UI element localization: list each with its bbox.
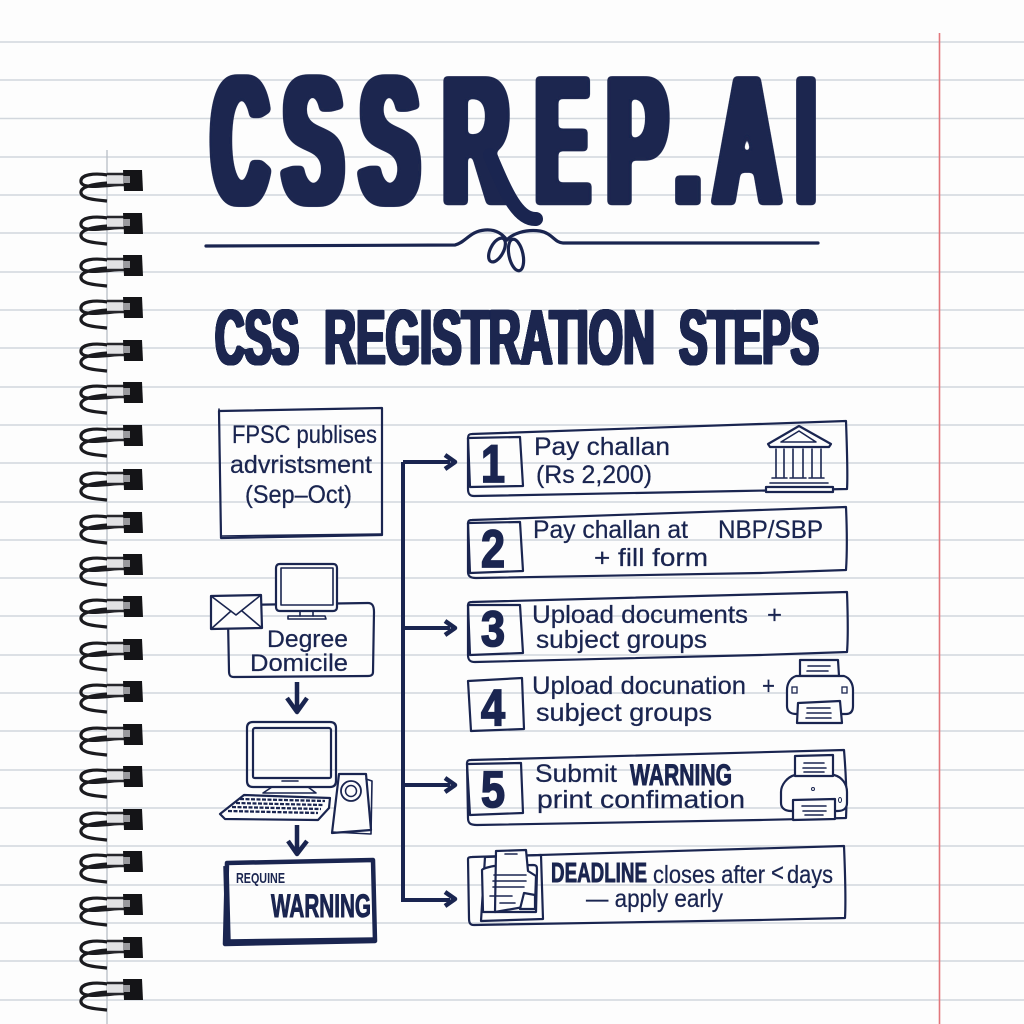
step 5: 5 [481,761,505,818]
arrow: documents to computer [287,682,307,712]
step 3: Upload documents [532,601,748,629]
icon: small monitor [276,564,337,619]
icon: printer with paper [781,755,847,820]
spiral binding [81,170,143,1010]
panel: warning box: WARNING [271,888,371,924]
deadline panel: — apply early [586,885,723,913]
step 2: Pay challan at [533,516,688,544]
step 4: subject groups [536,699,712,727]
panel: warning box: REQUINE [236,870,285,887]
title [212,37,814,243]
panel: degree and domicile documents: Domicile [250,650,348,677]
step 2 [468,507,847,579]
text: I [798,37,814,243]
step 1: 1 [481,435,505,494]
step 3: subject groups [536,626,707,654]
title flourish [206,230,818,272]
step 4 [468,660,853,736]
step 5: print confimation [537,786,745,814]
step 2: 2 [481,520,505,579]
deadline panel: closes after [653,861,765,889]
subtitle: CSS [215,293,299,381]
title: . [674,37,702,243]
icon: printer [787,660,853,723]
step 3 [468,592,848,662]
panel: warning box [225,860,375,944]
R tail swash [490,155,536,219]
title: P [607,37,667,243]
deadline panel: DEADLINE [551,857,647,888]
step 3: 3 [481,601,505,657]
panel: degree and domicile documents: Degree [267,626,348,653]
icon: bank [766,426,833,492]
title: A [714,37,780,243]
title: S [283,37,343,243]
subtitle: REGISTRATION [324,293,655,381]
panel: advertisement note: FPSC publises [232,421,377,449]
step 1: Pay challan [534,433,670,461]
step 1: (Rs 2,200) [536,461,652,489]
step 1 [468,421,847,496]
subtitle: STEPS [679,293,819,381]
connector with arrows to steps [403,455,455,906]
panel: degree and domicile documents [211,564,374,677]
step 4: 4 [481,679,506,736]
step 3: + [767,601,782,629]
step 4: + [762,672,775,700]
step 2: NBP/SBP [718,516,823,544]
title: S [360,37,419,243]
panel: advertisement note [219,408,382,538]
title: C [212,37,268,243]
title: R [443,37,509,243]
icon: clipboard document [481,850,543,921]
deadline panel: < [771,859,784,887]
panel: advertisement note: advristsment [230,451,372,479]
step 5: Submit [535,760,617,788]
deadline panel [468,846,845,925]
arrow: computer to warning [288,825,307,854]
deadline panel: days [787,861,833,889]
step 5: WARNING [630,759,732,792]
icon: envelope [211,595,262,629]
panel: advertisement note: (Sep–Oct) [245,481,352,509]
step 2: + fill form [594,544,708,572]
step 5 [467,750,847,825]
step 4: Upload docunation [532,672,746,700]
title: E [536,37,589,243]
icon: computer with keyboard and card [220,722,372,834]
